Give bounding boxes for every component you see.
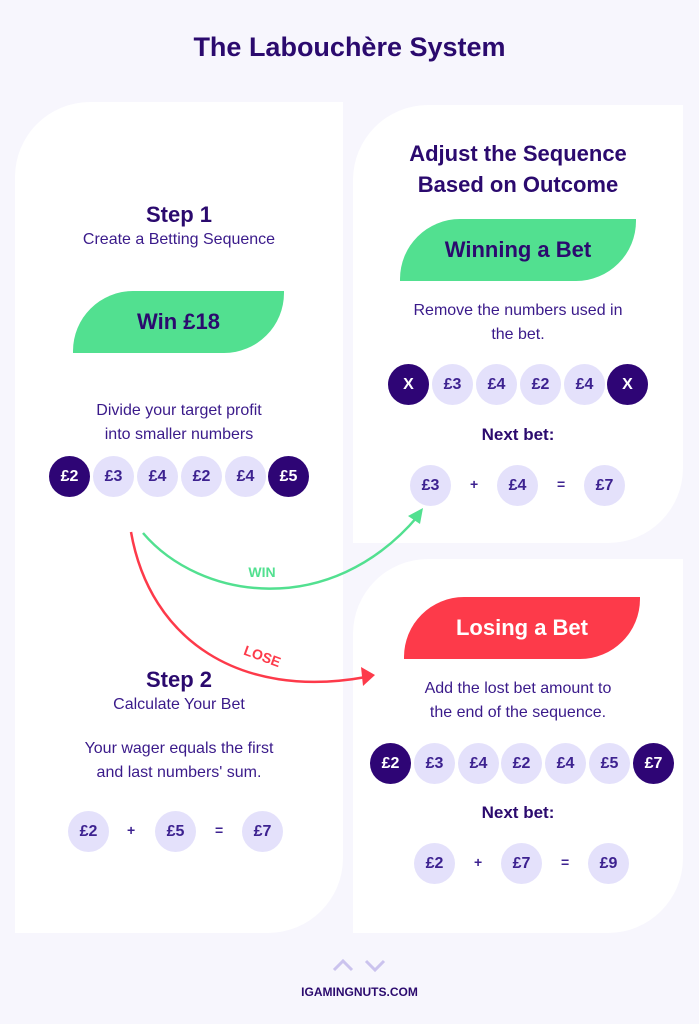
footer: IGAMINGNUTS.COM xyxy=(301,985,418,999)
step 1 heading: Step 1 xyxy=(146,202,212,227)
sequence row xyxy=(370,743,674,784)
text: add: the end of the sequence. xyxy=(430,704,606,721)
text: remove: Remove the numbers used in xyxy=(414,302,622,319)
equation xyxy=(68,811,283,852)
step 2 heading: Step 2 xyxy=(146,667,212,692)
text: remove xyxy=(414,302,622,343)
panel: losing xyxy=(353,559,683,933)
sequence row: £3 xyxy=(444,376,461,392)
sequence row: £2 xyxy=(193,468,210,484)
step 2 heading xyxy=(113,667,245,713)
equation: £3 xyxy=(422,476,439,494)
equation: £7 xyxy=(254,822,271,840)
sequence row: £2 xyxy=(61,468,78,484)
label: win: WIN xyxy=(248,564,276,580)
sequence row: £2 xyxy=(382,754,399,772)
sequence row: £2 xyxy=(532,376,549,392)
equation: £5 xyxy=(167,822,184,840)
equation: = xyxy=(561,854,569,870)
sequence row: £4 xyxy=(149,468,166,484)
sequence row: £5 xyxy=(601,754,618,772)
badge: losing: Losing a Bet xyxy=(456,615,588,640)
equation: £7 xyxy=(513,854,530,872)
text: add xyxy=(424,680,611,721)
text: wager: and last numbers' sum. xyxy=(97,764,261,781)
heading: Based on Outcome xyxy=(418,172,618,197)
sequence row: £4 xyxy=(488,376,505,392)
equation: + xyxy=(127,822,135,838)
equation: £7 xyxy=(596,476,613,494)
sequence row xyxy=(49,456,309,497)
equation: = xyxy=(557,476,565,492)
sequence row: £4 xyxy=(470,754,487,772)
text: add: Add the lost bet amount to xyxy=(425,680,611,697)
badge: losing xyxy=(404,597,640,659)
text: divide xyxy=(96,402,262,443)
equation: £2 xyxy=(426,854,443,872)
badge: winning xyxy=(400,219,636,281)
heading: Adjust the Sequence xyxy=(409,141,627,166)
text: divide: Divide your target profit xyxy=(96,402,262,419)
equation: £4 xyxy=(509,476,526,494)
equation xyxy=(414,843,629,884)
equation: £2 xyxy=(80,822,97,840)
sequence row: X xyxy=(622,376,633,392)
step 1 heading xyxy=(83,202,275,248)
text: wager: Your wager equals the first xyxy=(85,740,273,757)
sequence row: £7 xyxy=(645,754,662,772)
step 1 heading: Create a Betting Sequence xyxy=(83,231,275,248)
label: lose: LOSE xyxy=(242,642,283,670)
panel: winning xyxy=(353,105,683,543)
sequence row: £4 xyxy=(237,468,254,484)
sequence row: £4 xyxy=(557,754,574,772)
sequence row: £5 xyxy=(280,468,297,484)
equation: + xyxy=(474,854,482,870)
sequence row xyxy=(388,364,648,405)
equation xyxy=(410,465,625,506)
sequence row: X xyxy=(403,376,414,392)
next bet label: Next bet: xyxy=(482,803,554,822)
title: The Labouchère System xyxy=(193,32,506,62)
logo icon xyxy=(334,961,384,970)
badge: win £18 xyxy=(73,291,284,353)
step 2 heading: Calculate Your Bet xyxy=(113,696,245,713)
badge: winning: Winning a Bet xyxy=(445,237,591,262)
sequence row: £3 xyxy=(105,468,122,484)
arrow: lose xyxy=(131,532,375,686)
heading xyxy=(409,141,627,197)
sequence row: £2 xyxy=(513,754,530,772)
text: divide: into smaller numbers xyxy=(105,426,253,443)
sequence row: £4 xyxy=(576,376,593,392)
equation: = xyxy=(215,822,223,838)
badge: win £18: Win £18 xyxy=(137,309,220,334)
equation: £9 xyxy=(600,854,617,872)
arrow: win xyxy=(143,508,423,589)
equation: + xyxy=(470,476,478,492)
text: remove: the bet. xyxy=(491,326,545,343)
next bet label: Next bet: xyxy=(482,425,554,444)
text: wager xyxy=(85,740,274,781)
panel: step 1 and 2 xyxy=(15,102,343,933)
sequence row: £3 xyxy=(426,754,443,772)
